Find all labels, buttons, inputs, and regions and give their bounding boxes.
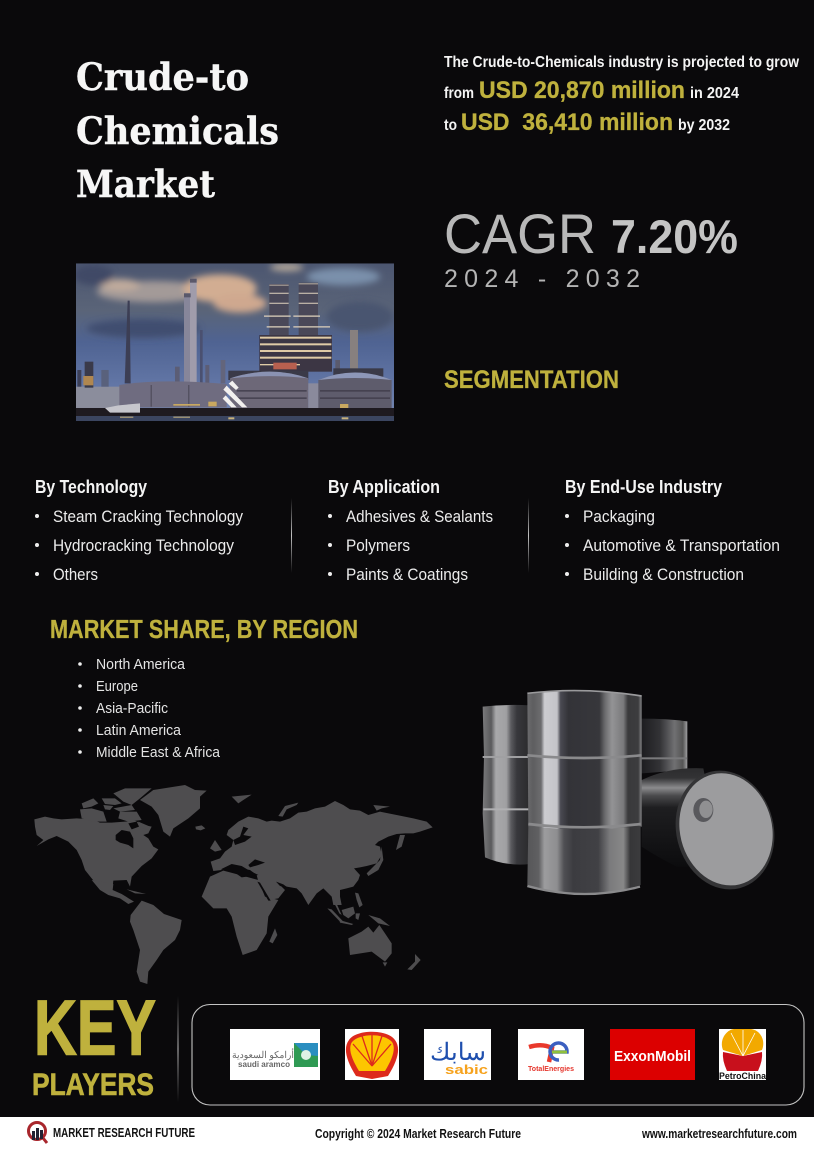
clouds [73,263,393,338]
segment column: by end-use industry: By End-Use Industry [565,476,723,497]
market size summary: to [444,117,457,134]
CAGR: CAGR [444,202,596,265]
CAGR [444,202,738,293]
copyright: Copyright © 2024 Market Research Future [315,1127,521,1141]
segment column: by technology: Steam Cracking Technology [53,508,244,526]
heading: key players: KEY [34,984,156,1072]
segment column: by technology [35,476,244,584]
chimneys [184,293,190,382]
south america [130,901,182,984]
lattice mast [125,301,131,383]
segment column: by technology: By Technology [35,476,148,497]
heading: market share by region: MARKET SHARE, BY REGION [50,616,358,644]
logo: saudi aramco [230,1029,320,1080]
logo: market research future: MARKET RESEARCH FUTURE [53,1126,195,1140]
segment column: by end-use industry [565,476,780,584]
title: Chemicals [76,109,279,153]
market size summary: USD 36,410 million [461,109,673,136]
logo: petrochina [719,1029,767,1081]
title: Crude-to [76,55,249,99]
logo: sabic: سابك [430,1039,486,1066]
region list: North America [96,656,186,673]
logo: sabic: sabic [445,1062,488,1077]
panel: key player logos [192,1004,804,1105]
region list [78,656,221,761]
logo: sabic [424,1029,491,1080]
white stripes mark [223,381,247,407]
region list: Middle East & Africa [96,744,221,761]
madagascar [269,928,277,943]
title [76,55,279,206]
north america and arctic islands [34,785,207,890]
logo: exxonmobil: ExxonMobil [614,1048,691,1065]
world map [34,785,433,984]
logo: saudi aramco: أرامكو السعودية [232,1048,294,1061]
central america and cuba [92,880,134,904]
icon: oil barrels [483,690,787,900]
segment column: by end-use industry: Building & Construction [583,566,744,584]
segment column: by application: By Application [328,476,440,497]
market size summary: from [444,85,474,102]
market size summary [444,54,799,136]
CAGR: 7.20% [611,210,738,263]
refinery tower [269,284,289,337]
title: Market [76,162,215,206]
segment column: by technology: Hydrocracking Technology [53,537,235,555]
logo: petrochina: PetroChina [719,1071,767,1081]
market size summary: in 2024 [690,85,739,102]
region list: Europe [96,678,138,695]
iceland [195,825,205,830]
segment column: by end-use industry: Automotive & Transportation [583,537,780,555]
logo: totalenergies [518,1029,584,1080]
logo: shell [345,1029,399,1080]
segment column: by application [328,476,493,584]
southeast asia and oceania [327,893,421,970]
region list: Asia-Pacific [96,700,168,717]
segment column: by application: Paints & Coatings [346,566,468,584]
segment column: by technology: Others [53,566,98,584]
market size summary: USD 20,870 million [479,77,685,104]
logo: totalenergies: TotalEnergies [528,1066,574,1073]
heading: segmentation: SEGMENTATION [444,366,619,394]
segment column: by end-use industry: Packaging [583,508,655,526]
africa [202,871,278,955]
shore [76,408,394,417]
logo: exxonmobil [610,1029,695,1080]
eurasia and nearby islands [210,795,433,905]
heading: key players [32,984,156,1102]
market size summary: by 2032 [678,117,730,134]
region list: Latin America [96,722,182,739]
footer [0,1117,814,1150]
segment column: by application: Adhesives & Sealants [346,508,493,526]
photo: refinery at dusk [73,263,394,421]
logo: market research future [28,1122,195,1143]
heading: key players: PLAYERS [32,1066,154,1102]
storage tanks [119,381,227,407]
CAGR: 2024 - 2032 [444,265,640,293]
far plant [76,386,120,408]
segment column: by application: Polymers [346,537,410,555]
logo: saudi aramco: saudi aramco [238,1060,290,1069]
